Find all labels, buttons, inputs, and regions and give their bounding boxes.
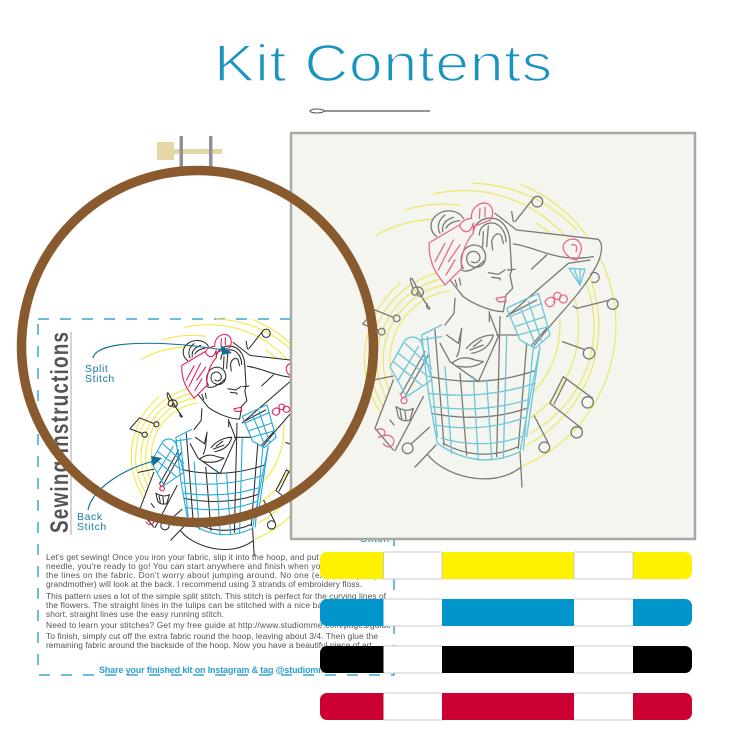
- small embroidery pattern: [130, 319, 329, 556]
- callout: split stitch: [85, 343, 232, 385]
- instruction text: needle, you're ready to go! You can start anywhere and finish when you've stitched all of: [46, 561, 392, 571]
- callout: running stitch label fragment: Stitch: [360, 533, 390, 545]
- thread card: red: [320, 693, 692, 720]
- callout: back stitch: Back: [77, 511, 103, 523]
- vertical heading: Sewing Instructions: [46, 332, 74, 533]
- instruction text: the lines on the fabric. Don't worry about jumping around. No one (except maybe your: [46, 570, 391, 580]
- title: Kit Contents: [214, 34, 552, 92]
- callout: split stitch: Split: [85, 363, 108, 375]
- instruction text: the flowers. The straight lines in the tulips can be stitched with a nice back stitch. For the: [46, 600, 386, 610]
- share line: Share your finished kit on Instagram & tag @studiomme: [99, 665, 331, 675]
- fabric embroidery pattern: [363, 183, 618, 487]
- panel: printed fabric: [291, 133, 695, 539]
- instruction text: short, straight lines use the easy running stitch.: [46, 609, 224, 619]
- instruction text: [46, 552, 392, 650]
- thread card: yellow: [320, 552, 692, 579]
- dashed border: [38, 319, 394, 675]
- instruction text: grandmother) will look at the back. I recommend using 3 strands of embroidery floss.: [46, 579, 362, 589]
- thread card: black: [320, 646, 692, 673]
- callout: split stitch: Stitch: [85, 373, 115, 385]
- instruction text: Need to learn your stitches? Get my free guide at http://www.studiomme.com/pages/guide: [46, 620, 391, 630]
- callout: back stitch: Stitch: [77, 521, 107, 533]
- icon: needle divider: [310, 109, 430, 113]
- thread card: blue: [320, 599, 692, 626]
- instruction text: This pattern uses a lot of the simple split stitch. This stitch is perfect for the curving lines of: [46, 591, 387, 601]
- instruction text: Let's get sewing! Once you iron your fabric, slip it into the hoop, and put the thread on your: [46, 552, 391, 562]
- instruction text: remaining fabric around the backside of the hoop. Now you have a beautiful piece of art.: [46, 640, 374, 650]
- icon: embroidery hoop ring: [22, 170, 374, 522]
- callout: back stitch: [77, 456, 162, 533]
- instruction text: To finish, simply cut off the extra fabric round the hoop, leaving about 3/4. Then glue the: [46, 631, 378, 641]
- panel: sewing instructions sheet: [38, 319, 394, 675]
- icon: embroidery hoop screw: [157, 136, 222, 168]
